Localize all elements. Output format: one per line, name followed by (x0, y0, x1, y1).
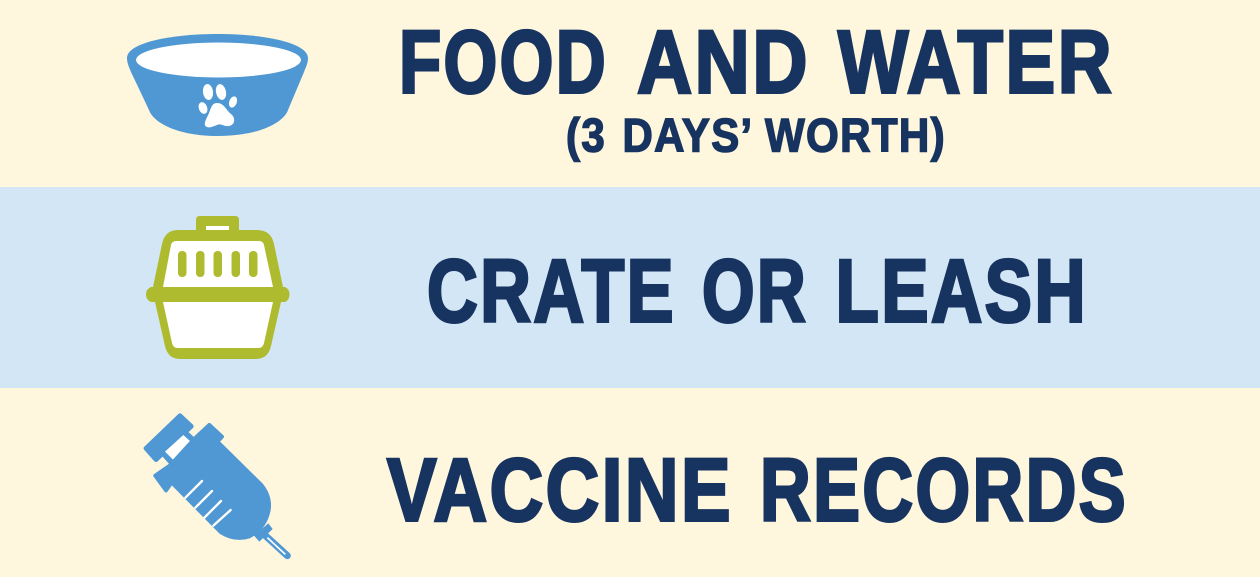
panel: crate band (0, 187, 1260, 388)
heading: vaccine records: RECORDS (760, 440, 1128, 540)
icon: pet bowl (127, 34, 308, 136)
subheading: three days' worth: (3 (566, 108, 606, 162)
subheading: three days' worth: DAYS’ (622, 108, 754, 162)
heading: crate or leash: CRATE (427, 240, 676, 340)
panel: vaccine records (146, 416, 1128, 556)
heading: food and water: WATER (838, 12, 1114, 112)
heading: food and water: FOOD (399, 12, 608, 112)
panel: food and water (127, 12, 1114, 162)
heading: food and water: AND (637, 12, 810, 112)
panel: crate or leash (146, 216, 1088, 359)
heading: vaccine records: VACCINE (387, 440, 733, 540)
heading: crate or leash (427, 240, 1088, 340)
subheading: three days' worth: WORTH) (765, 108, 946, 162)
heading: vaccine records (387, 440, 1128, 540)
icon: syringe (146, 416, 287, 556)
subheading: three days' worth (566, 108, 946, 162)
heading: crate or leash: LEASH (836, 240, 1088, 340)
syringe gradation marks (185, 481, 231, 526)
heading: crate or leash: OR (702, 240, 808, 340)
icon: paw print (197, 83, 239, 127)
crate vent slats (178, 251, 258, 277)
icon: pet crate (146, 216, 290, 359)
heading: food and water (399, 12, 1114, 112)
